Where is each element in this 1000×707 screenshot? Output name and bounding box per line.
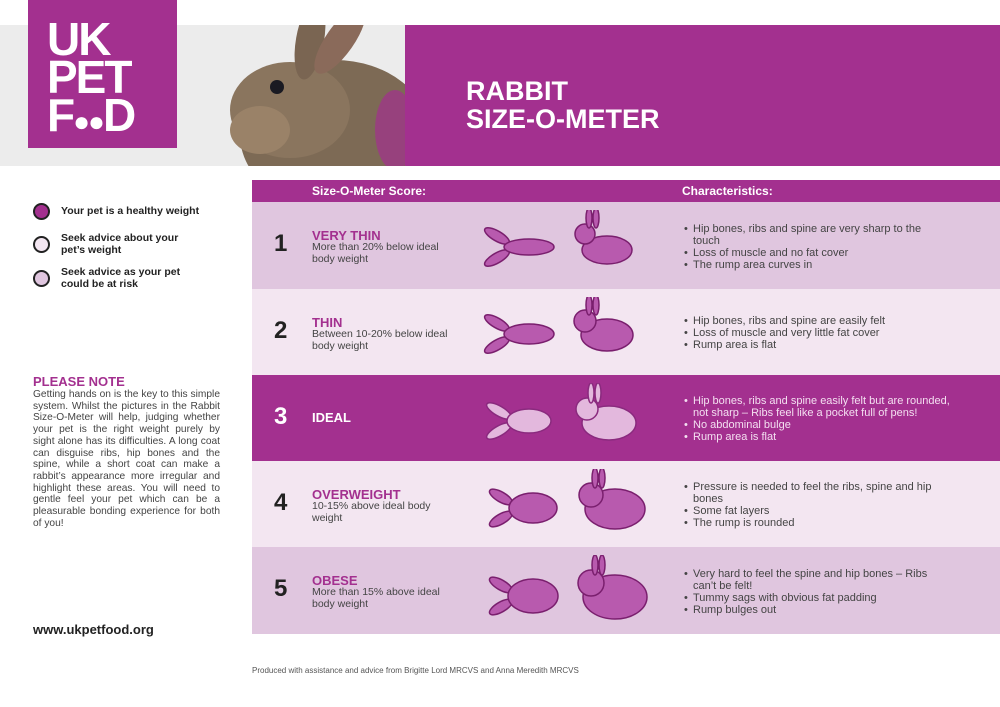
photo: rabbit xyxy=(230,25,405,166)
row 4: Pressure is needed to feel the ribs, spine and hip bones xyxy=(693,481,931,505)
logo xyxy=(28,0,177,148)
legend xyxy=(33,203,199,290)
row 3: Hip bones, ribs and spine easily felt but are rounded, not sharp – Ribs feel like a pocket full of pens! xyxy=(693,395,950,419)
row 1: VERY THIN xyxy=(312,228,381,243)
row 1: The rump area curves in xyxy=(693,259,812,271)
please note: Getting hands on is the key to this simple system. Whilst the pictures in the Rabbit Size-O-Meter will help, judging whether your pet is the right weight purely by sight alone has its difficulties. A long coat can disguise ribs, hip bones and the spine, while a short coat can make a rabbit’s appearance more irregular and highlight these areas. You will need to gentle feel your pet which can be a pleasurable bonding experience for both of you! xyxy=(33,389,220,529)
row 4: 10-15% above ideal body weight xyxy=(312,500,431,524)
please note: PLEASE NOTE xyxy=(33,374,125,389)
legend: healthy xyxy=(33,203,199,220)
icon: rabbits ideal xyxy=(486,383,637,441)
legend: seek advice: pet’s weight xyxy=(61,244,121,256)
row 5: 5 xyxy=(274,575,287,602)
legend: seek advice xyxy=(33,232,178,256)
row 1: Loss of muscle and no fat cover xyxy=(693,247,848,259)
row 1: More than 20% below ideal body weight xyxy=(312,241,439,265)
row 4 xyxy=(252,461,1000,547)
table header: Size-O-Meter Score: xyxy=(312,184,426,198)
row 3: 3 xyxy=(274,403,287,430)
icon: rabbits obese xyxy=(488,555,648,620)
row 1: 1 xyxy=(274,230,287,257)
row 3: IDEAL xyxy=(312,410,351,425)
website: www.ukpetfood.org xyxy=(33,622,154,637)
legend: seek advice: Seek advice about your xyxy=(61,232,178,244)
icon: rabbits overweight xyxy=(488,469,646,530)
legend: at risk: could be at risk xyxy=(61,278,138,290)
row 2: 2 xyxy=(274,317,287,344)
icon: rabbits thin xyxy=(484,297,634,354)
legend: at risk: Seek advice as your pet xyxy=(61,266,180,278)
row 4: The rump is rounded xyxy=(693,517,794,529)
legend: healthy: Your pet is a healthy weight xyxy=(61,205,199,217)
row 4: OVERWEIGHT xyxy=(312,487,401,502)
row 4: 4 xyxy=(274,489,287,516)
logo: F●●D xyxy=(47,89,134,141)
row 2: Loss of muscle and very little fat cover xyxy=(693,327,879,339)
header grey band xyxy=(0,25,405,166)
row 4: Some fat layers xyxy=(693,505,769,517)
title banner: RABBIT xyxy=(466,76,568,106)
row 1: Hip bones, ribs and spine are very sharp to the touch xyxy=(693,223,921,247)
table header xyxy=(252,180,1000,202)
row 2: Between 10-20% below ideal body weight xyxy=(312,328,447,352)
row 1 xyxy=(252,202,1000,289)
row 3 xyxy=(252,375,1000,461)
table header: Characteristics: xyxy=(682,184,773,198)
row 5: OBESE xyxy=(312,573,358,588)
row 2: Hip bones, ribs and spine are easily felt xyxy=(693,315,885,327)
logo: PET xyxy=(47,51,130,103)
logo: UK xyxy=(47,13,109,65)
row 3: Rump area is flat xyxy=(693,431,776,443)
row 2 xyxy=(252,289,1000,375)
row 5: Rump bulges out xyxy=(693,604,776,616)
icon: rabbits very thin xyxy=(484,210,633,267)
row 2: Rump area is flat xyxy=(693,339,776,351)
legend: at risk xyxy=(33,266,180,290)
row 3: No abdominal bulge xyxy=(693,419,791,431)
row 5: Very hard to feel the spine and hip bones – Ribs can’t be felt! xyxy=(693,568,927,592)
row 5 xyxy=(252,547,1000,634)
row 5: Tummy sags with obvious fat padding xyxy=(693,592,877,604)
title banner xyxy=(405,25,1000,166)
footer credit: Produced with assistance and advice from Brigitte Lord MRCVS and Anna Meredith MRCVS xyxy=(252,666,579,675)
title banner: SIZE-O-METER xyxy=(466,104,660,134)
row 5: More than 15% above ideal body weight xyxy=(312,586,440,610)
row 2: THIN xyxy=(312,315,342,330)
